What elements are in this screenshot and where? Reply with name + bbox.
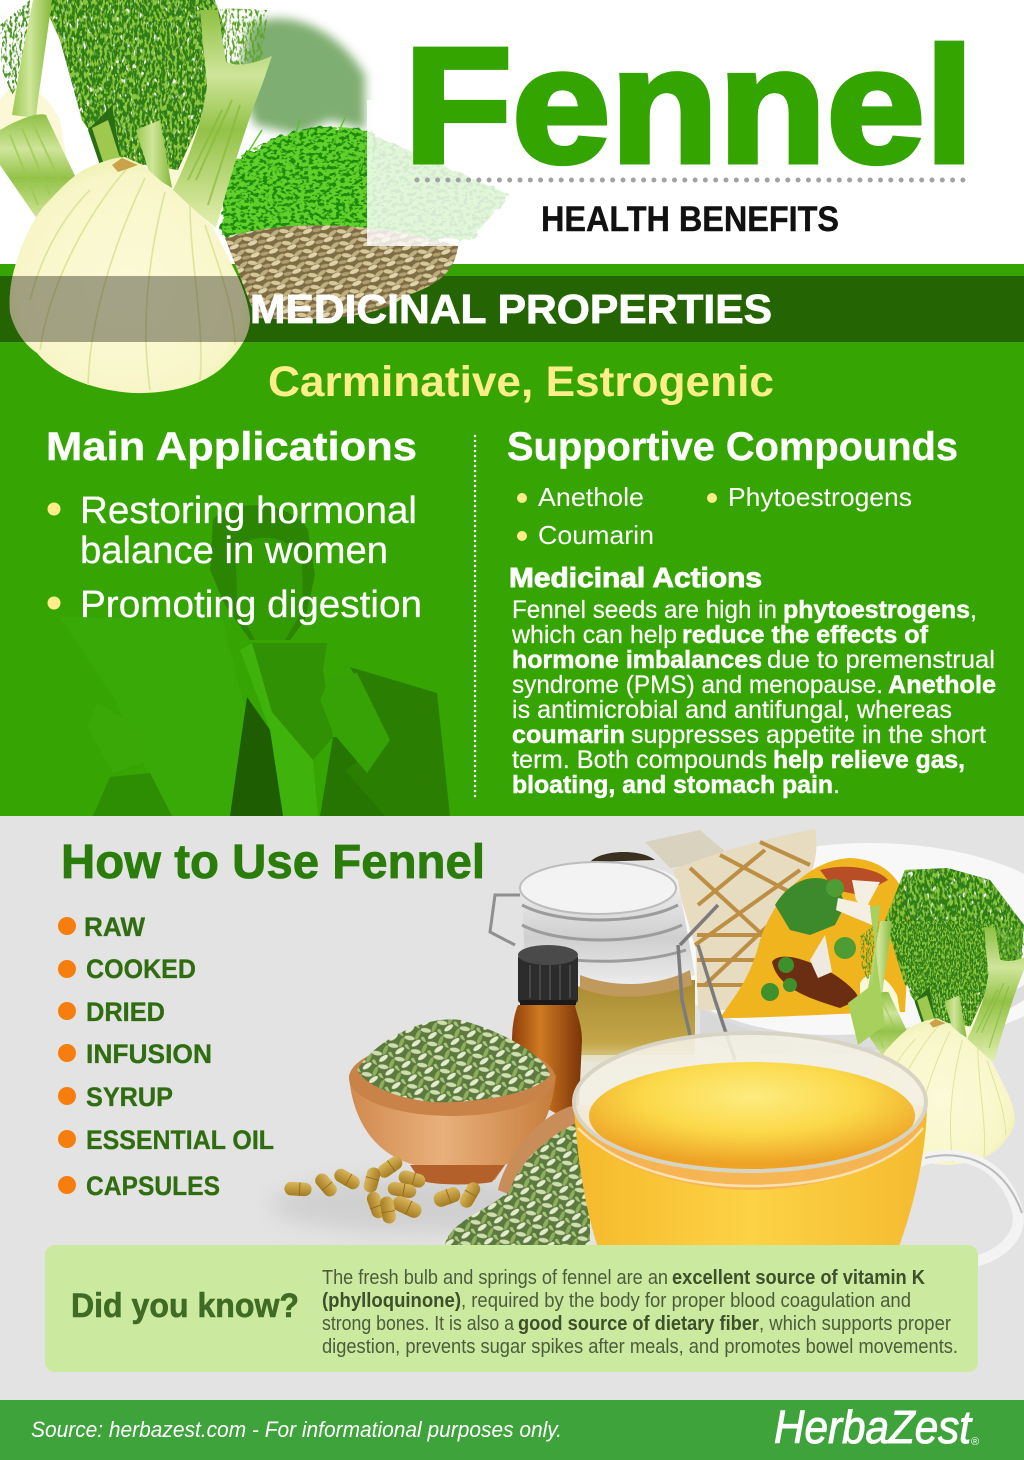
image: glass cup of fennel tea xyxy=(573,1033,1022,1262)
medicinal actions text: term. Both compounds xyxy=(512,746,767,774)
medicinal actions text xyxy=(511,596,996,799)
medicinal actions text: which can help xyxy=(511,621,677,649)
application: digestion: Promoting digestion xyxy=(80,584,422,626)
usage list: ESSENTIAL OIL xyxy=(86,1125,274,1155)
medicinal actions text: help relieve gas, xyxy=(773,746,965,774)
footer xyxy=(0,1400,1024,1460)
image: essential oil bottle xyxy=(512,945,582,1125)
image: women holding a fan silhouette xyxy=(60,505,450,816)
dotted column divider xyxy=(474,436,476,797)
usage list: RAW xyxy=(84,912,145,942)
callout text: strong bones. It is also a xyxy=(322,1313,515,1335)
dotted divider xyxy=(417,178,968,182)
usage list: CAPSULES xyxy=(86,1171,220,1201)
image: fennel bulb xyxy=(0,0,272,393)
medicinal actions text: reduce the effects of xyxy=(682,621,929,649)
green properties panel xyxy=(0,264,1024,816)
image: fresh fennel bulb xyxy=(848,868,1024,1165)
white header background xyxy=(0,0,1024,264)
medicinal actions text: Fennel seeds are high in xyxy=(512,596,777,624)
callout: did you know xyxy=(45,1245,978,1372)
image: herbal capsules xyxy=(284,1154,483,1225)
compound list xyxy=(517,482,912,550)
logo: HerbaZest: ® xyxy=(971,1436,979,1448)
medicinal actions text: . xyxy=(833,771,840,799)
usage list: INFUSION xyxy=(86,1039,212,1069)
image: bowl of fennel seeds xyxy=(349,1019,556,1184)
callout text: good source of dietary fiber xyxy=(518,1313,759,1335)
panel: supportive compounds xyxy=(507,425,996,799)
image: fennel fronds and seeds xyxy=(222,19,512,319)
medicinal actions text: syndrome (PMS) and menopause. xyxy=(512,671,883,699)
logo: HerbaZest: HerbaZest xyxy=(774,1401,973,1453)
banner band xyxy=(0,276,1024,342)
usage list xyxy=(58,912,274,1201)
callout text xyxy=(322,1267,958,1358)
heading: How to Use Fennel xyxy=(61,836,485,889)
image: jar of fennel syrup xyxy=(490,862,735,1085)
image: plate of grilled fish and salad xyxy=(590,829,1024,1055)
panel: main applications xyxy=(46,425,422,626)
medicinal actions text: hormone imbalances xyxy=(512,646,762,674)
usage list: DRIED xyxy=(86,997,165,1027)
callout text: The fresh bulb and springs of fennel are an xyxy=(322,1267,668,1289)
application: hormonal balance: Restoring hormonal xyxy=(80,490,417,532)
subtitle: HEALTH BENEFITS xyxy=(541,200,839,239)
medicinal actions text: coumarin xyxy=(512,721,625,749)
medicinal actions text: Anethole xyxy=(888,671,996,699)
source note: Source: herbazest.com - For informational purposes only. xyxy=(31,1417,562,1442)
heading: Supportive Compounds xyxy=(507,425,958,469)
application: hormonal balance xyxy=(48,490,417,572)
compound list: Coumarin xyxy=(538,520,654,550)
properties subheading: Carminative, Estrogenic xyxy=(268,358,774,406)
medicinal actions text: due to premenstrual xyxy=(767,646,995,674)
medicinal actions text: is antimicrobial and antifungal, whereas xyxy=(512,696,952,724)
fennel seed mound xyxy=(225,225,458,319)
callout text: (phylloquinone) xyxy=(322,1290,461,1312)
compound list: Anethole xyxy=(538,482,644,512)
image: scoop of fennel seeds xyxy=(445,1106,590,1245)
medicinal actions text: phytoestrogens xyxy=(783,596,970,624)
callout text: , which supports proper xyxy=(759,1313,951,1335)
banner heading: MEDICINAL PROPERTIES xyxy=(250,286,772,332)
application: hormonal balance: balance in women xyxy=(80,530,388,572)
callout heading: Did you know? xyxy=(71,1287,299,1325)
usage list: COOKED xyxy=(86,954,196,984)
medicinal actions heading: Medicinal Actions xyxy=(509,562,762,593)
callout text: , required by the body for proper blood coagulation and xyxy=(461,1290,911,1312)
panel: how to use xyxy=(0,816,1024,1400)
medicinal actions text: bloating, and stomach pain xyxy=(512,771,833,799)
bulb shade within banner xyxy=(0,276,260,342)
medicinal actions text: , xyxy=(970,596,977,624)
compound list: Phytoestrogens xyxy=(728,482,912,512)
medicinal actions text: suppresses appetite in the short xyxy=(631,721,986,749)
callout text: digestion, prevents sugar spikes after meals, and promotes bowel movements. xyxy=(322,1336,958,1358)
image: soft shadows on table xyxy=(270,1177,570,1233)
title: Fennel xyxy=(404,14,974,197)
usage list: SYRUP xyxy=(86,1082,173,1112)
callout text: excellent source of vitamin K xyxy=(672,1267,926,1289)
heading: Main Applications xyxy=(46,425,417,469)
